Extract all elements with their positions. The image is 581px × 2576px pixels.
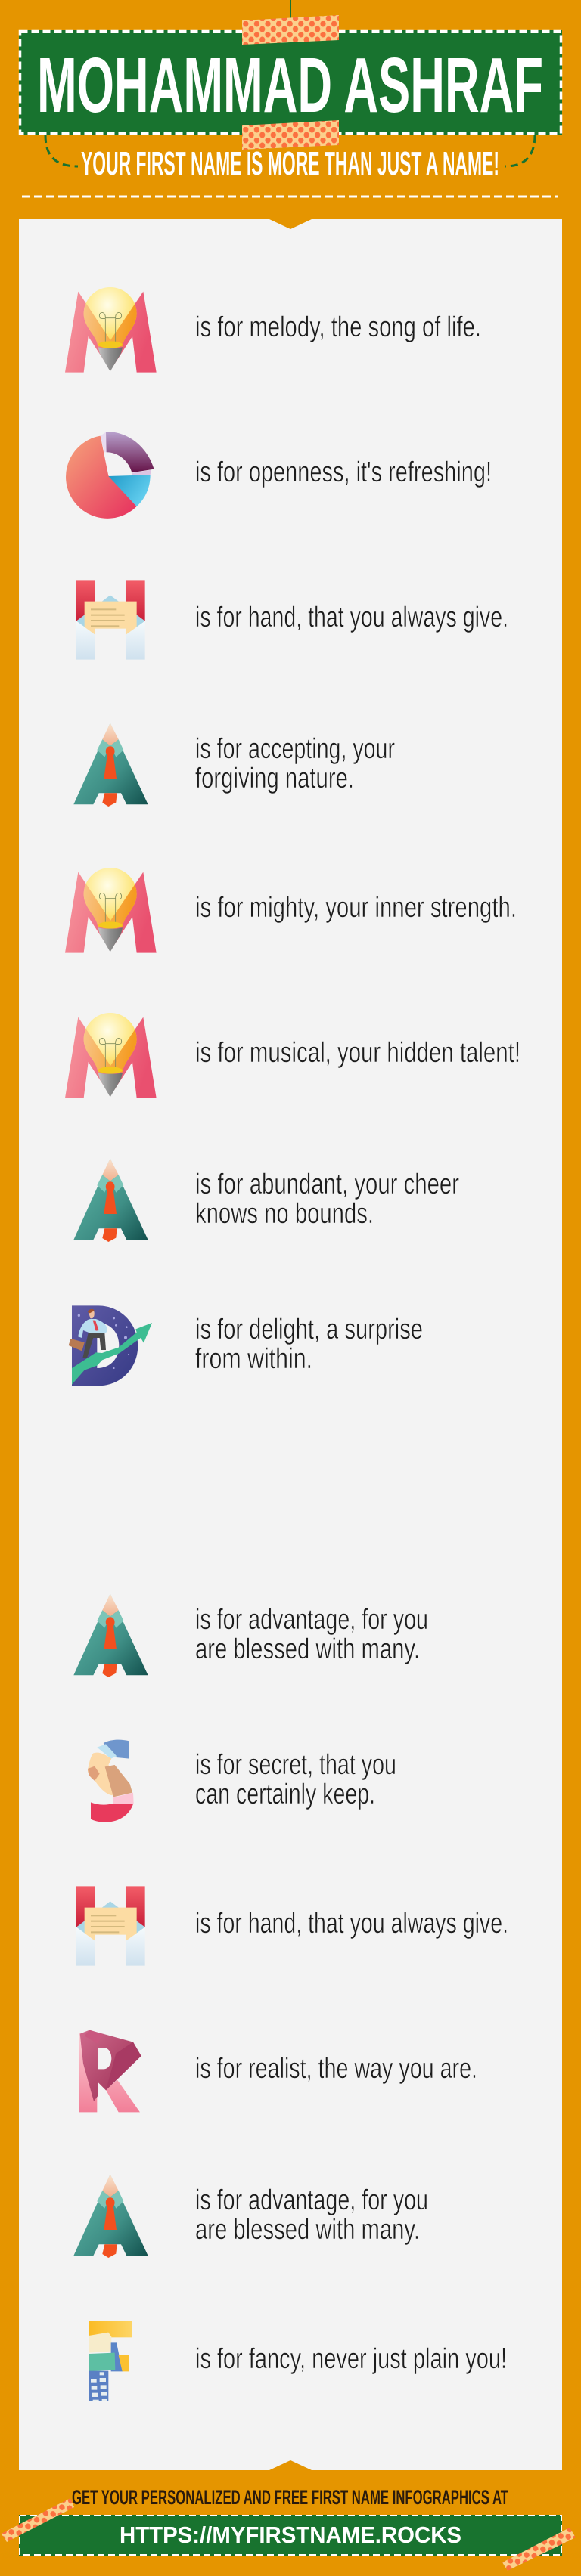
- row 1 icon: M: [65, 287, 157, 373]
- row 1 text: is for melody, the song of life.: [195, 311, 481, 343]
- row 13 text: is for advantage, for you: [195, 2184, 428, 2216]
- row 8 text: [195, 1314, 423, 1375]
- row 10 text: [195, 1749, 396, 1810]
- footer url banner: [19, 2515, 562, 2556]
- title banner: [19, 30, 562, 135]
- row 7 text: [195, 1169, 459, 1230]
- row 2 text: is for openness, it's refreshing!: [195, 457, 492, 488]
- row 10 text: can certainly keep.: [195, 1779, 375, 1810]
- row 12 icon: R: [79, 2030, 141, 2112]
- row 9 text: is for advantage, for you: [195, 1604, 428, 1636]
- row 8 text: is for delight, a surprise: [195, 1314, 423, 1345]
- row 3 icon: H: [76, 580, 145, 661]
- row 9 text: [195, 1604, 428, 1665]
- row 8 icon: D: [69, 1305, 152, 1386]
- row 11 icon: H: [76, 1886, 145, 1968]
- row 7 text: is for abundant, your cheer: [195, 1169, 459, 1200]
- row 4 icon: A: [73, 723, 148, 807]
- left dashed connector: [45, 135, 78, 166]
- dashed divider: [22, 195, 558, 198]
- row 2 icon: O: [66, 432, 154, 519]
- row 12 text: is for realist, the way you are.: [195, 2053, 477, 2085]
- row 10 icon: S: [88, 1740, 134, 1822]
- row 5 icon: M: [65, 868, 157, 953]
- row 4 text: forgiving nature.: [195, 763, 354, 794]
- row 7 icon: A: [73, 1159, 148, 1242]
- tape: footer right: [502, 2528, 576, 2571]
- row 7 text: knows no bounds.: [195, 1198, 374, 1230]
- row 9 text: are blessed with many.: [195, 1633, 420, 1665]
- row 13 text: are blessed with many.: [195, 2214, 420, 2246]
- row 4 text: [195, 733, 395, 794]
- row 13 text: [195, 2184, 428, 2246]
- row 4 text: is for accepting, your: [195, 733, 395, 765]
- row 6 icon: M: [65, 1013, 157, 1098]
- row 8 text: from within.: [195, 1343, 312, 1375]
- tape: footer left: [2, 2498, 74, 2542]
- row 13 icon: A: [73, 2175, 148, 2258]
- row 14 icon: F: [89, 2321, 132, 2401]
- tape: bottom of banner: [242, 120, 339, 150]
- footer url: HTTPS://MYFIRSTNAME.ROCKS: [120, 2522, 461, 2548]
- row 9 icon: A: [73, 1594, 148, 1677]
- row 10 text: is for secret, that you: [195, 1749, 396, 1781]
- hanging string: [290, 0, 291, 20]
- right dashed connector: [505, 135, 535, 166]
- tape: top of banner: [242, 15, 339, 45]
